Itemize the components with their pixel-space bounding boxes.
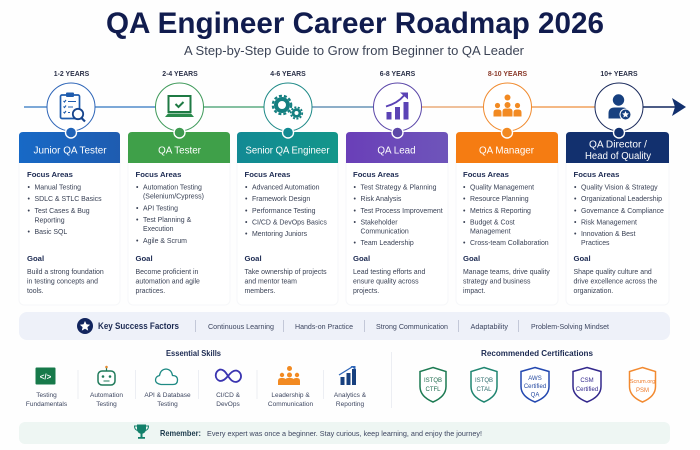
panel: QA manager details: Quality Management bbox=[470, 184, 534, 192]
panel: senior QA engineer details: Performance Testing bbox=[252, 208, 316, 215]
icon: gears stage bbox=[264, 83, 312, 131]
panel: QA manager details: Metrics & Reporting bbox=[470, 208, 531, 215]
skill: analytics and reporting bbox=[334, 366, 367, 408]
panel: QA director details: • bbox=[574, 196, 577, 203]
year labels: 10+ YEARS bbox=[600, 71, 638, 78]
badge: AWS Certified QA bbox=[521, 368, 549, 402]
skill: API and database testing: Testing bbox=[157, 401, 178, 408]
panel: senior QA engineer details: • bbox=[245, 208, 248, 215]
skill: leadership and communication bbox=[268, 366, 313, 408]
panel: QA manager details: Management bbox=[470, 228, 511, 236]
panel: QA tester details: automation and agile bbox=[136, 278, 200, 286]
badge: Scrum PSM bbox=[630, 368, 656, 402]
panel: key success factors: Hands-on Practice bbox=[295, 322, 353, 331]
panel: QA manager details: • bbox=[463, 240, 466, 247]
panel: stage headers: QA Lead bbox=[377, 146, 416, 156]
panel: QA director details bbox=[574, 170, 664, 295]
panel: senior QA engineer details: Focus Areas bbox=[244, 170, 290, 179]
skill: automation testing bbox=[90, 366, 123, 408]
skill: leadership and communication: Leadership & bbox=[271, 392, 310, 399]
skill: leadership and communication: Communication bbox=[268, 401, 313, 408]
badge: Scrum PSM: Scrum.org bbox=[630, 379, 655, 385]
skill: API and database testing bbox=[144, 369, 191, 408]
panel: junior QA tester details: in testing concepts and bbox=[27, 278, 98, 286]
panel: QA manager details: • bbox=[463, 184, 466, 192]
panel: QA manager details: Budget & Cost bbox=[470, 220, 515, 226]
skill: automation testing: Automation bbox=[90, 392, 123, 399]
year labels: 1-2 YEARS bbox=[54, 71, 90, 78]
skill: CI/CD and DevOps: CI/CD & bbox=[216, 392, 241, 399]
panel: junior QA tester details: Manual Testing bbox=[34, 184, 81, 192]
panel: QA director details: Risk Management bbox=[581, 220, 637, 226]
heading: essential skills: Essential Skills bbox=[166, 348, 221, 358]
panel: junior QA tester details: Build a strong foundation bbox=[27, 269, 104, 276]
panel: stage headers: QA Director / bbox=[589, 140, 647, 150]
panel: QA director details: • bbox=[574, 184, 577, 192]
panel: QA lead details: • bbox=[354, 220, 356, 226]
panel: junior QA tester details: Basic SQL bbox=[34, 229, 67, 236]
panel: junior QA tester details: • bbox=[28, 196, 30, 203]
panel: QA director details: • bbox=[574, 220, 577, 226]
skill: testing fundamentals: </> bbox=[40, 372, 52, 382]
panel: QA tester details: • bbox=[136, 217, 139, 224]
panel: key success factors: Key Success Factors bbox=[98, 321, 179, 331]
panel: senior QA engineer details: members. bbox=[244, 288, 275, 295]
panel: QA lead details: projects. bbox=[353, 288, 379, 295]
skill: API and database testing: API & Database bbox=[144, 392, 191, 399]
badge: ISTQB CTAL: CTAL bbox=[477, 387, 492, 393]
panel: stage headers: QA Tester bbox=[158, 146, 202, 156]
panel: QA lead details: • bbox=[354, 208, 356, 215]
panel: QA tester details: Become proficient in bbox=[136, 269, 198, 276]
year labels: 2-4 YEARS bbox=[162, 71, 198, 78]
panel: QA director details: • bbox=[574, 231, 577, 238]
badge: Scrum PSM: PSM bbox=[636, 388, 649, 394]
skill: testing fundamentals bbox=[26, 368, 68, 408]
badge: CSM Certified bbox=[573, 368, 601, 402]
panel: QA lead details: Goal bbox=[353, 254, 370, 263]
panel: QA manager details: Resource Planning bbox=[470, 196, 529, 203]
panel: senior QA engineer details bbox=[244, 170, 327, 295]
panel: QA lead details: • bbox=[354, 184, 356, 192]
panel: QA lead details: Stakeholder bbox=[360, 220, 398, 226]
panel: senior QA engineer details: Take ownership of projects bbox=[244, 269, 327, 276]
panel: QA lead details: Focus Areas bbox=[353, 170, 399, 179]
panel: QA director details: Governance & Compliance bbox=[581, 208, 664, 215]
panel: senior QA engineer details: and mentor team bbox=[244, 278, 297, 286]
panel: QA tester details: Focus Areas bbox=[136, 170, 181, 179]
panel: QA director details: Practices bbox=[581, 240, 610, 247]
panel: senior QA engineer details: • bbox=[245, 231, 248, 238]
panel: QA lead details: Team Leadership bbox=[360, 240, 414, 247]
skill: testing fundamentals: Testing bbox=[36, 392, 57, 399]
panel: senior QA engineer details: Framework Design bbox=[252, 196, 310, 203]
panel: QA tester details: • bbox=[136, 184, 139, 192]
panel: senior QA engineer details: • bbox=[245, 184, 248, 192]
panel: senior QA engineer details: Advanced Automation bbox=[252, 184, 320, 192]
icon: growth chart stage bbox=[374, 83, 422, 131]
badge: ISTQB CTFL: CTFL bbox=[426, 387, 441, 393]
panel: QA director details: Goal bbox=[574, 254, 591, 263]
icon: trophy bbox=[134, 424, 148, 439]
panel: QA manager details: impact. bbox=[463, 288, 485, 295]
timeline arrow bbox=[24, 98, 686, 116]
badge: ISTQB CTFL: ISTQB bbox=[424, 378, 442, 384]
panel: key success factors: Strong Communication bbox=[376, 322, 448, 331]
year labels: 6-8 YEARS bbox=[380, 71, 416, 78]
skill: testing fundamentals: Fundamentals bbox=[26, 401, 68, 408]
panel: stage headers bbox=[19, 132, 669, 163]
year labels: 8-10 YEARS bbox=[488, 71, 528, 78]
panel: QA manager details: Goal bbox=[463, 254, 480, 263]
badge: CSM Certified: Certified bbox=[576, 387, 598, 393]
panel: QA director details: Quality Vision & Strategy bbox=[581, 184, 658, 192]
skill: CI/CD and DevOps bbox=[216, 370, 241, 408]
panel: senior QA engineer details: Mentoring Juniors bbox=[252, 231, 308, 238]
panel: QA tester details: practices. bbox=[136, 288, 165, 295]
skill: CI/CD and DevOps: DevOps bbox=[216, 401, 240, 408]
panel: junior QA tester details: Reporting bbox=[34, 218, 65, 224]
badge: AWS Certified QA: QA bbox=[531, 392, 539, 398]
panel: QA manager details: strategy and business bbox=[463, 278, 531, 286]
panel: QA tester details: Goal bbox=[136, 254, 153, 263]
badge: AWS Certified QA: AWS bbox=[528, 376, 542, 382]
badge: CSM Certified: CSM bbox=[580, 378, 594, 384]
panel: QA director details: • bbox=[574, 208, 577, 215]
panel: card bodies bbox=[19, 150, 669, 305]
panel: key success factors: Continuous Learning bbox=[208, 322, 274, 331]
panel: senior QA engineer details: CI/CD & DevOps Basics bbox=[252, 220, 327, 226]
panel: junior QA tester details: SDLC & STLC Basics bbox=[34, 196, 102, 203]
panel: junior QA tester details: • bbox=[28, 208, 30, 215]
panel: QA manager details: Manage teams, drive quality bbox=[463, 269, 550, 276]
panel: remember banner: Every expert was once a beginner. Stay curious, keep learning, and enjoy the journey! bbox=[207, 429, 482, 438]
panel: QA tester details: Test Planning & bbox=[143, 217, 192, 224]
panel: stage headers: Head of Quality bbox=[585, 151, 651, 162]
panel: senior QA engineer details: Goal bbox=[244, 254, 262, 263]
badge: ISTQB CTAL bbox=[471, 368, 497, 402]
panel: QA manager details: • bbox=[463, 208, 466, 215]
subtitle: A Step-by-Step Guide to Grow from Beginner to QA Leader bbox=[184, 43, 525, 58]
skill: analytics and reporting: Analytics & bbox=[334, 392, 367, 399]
panel: junior QA tester details: Test Cases & Bug bbox=[34, 208, 90, 215]
panel: junior QA tester details bbox=[27, 170, 104, 295]
panel: QA director details: Shape quality culture and bbox=[574, 269, 652, 276]
panel: QA director details: drive excellence across the bbox=[574, 278, 657, 286]
panel: stage headers: Junior QA Tester bbox=[34, 146, 107, 156]
panel: remember banner: Remember: bbox=[160, 429, 201, 438]
panel: QA lead details bbox=[353, 170, 443, 295]
panel: QA lead details: Test Strategy & Planning bbox=[360, 184, 437, 192]
skill: analytics and reporting: Reporting bbox=[336, 401, 364, 408]
icon: leader star stage bbox=[595, 83, 643, 131]
panel: QA tester details: • bbox=[136, 206, 139, 212]
panel: QA lead details: Communication bbox=[360, 228, 409, 236]
panel: QA tester details bbox=[136, 170, 204, 295]
panel: QA tester details: (Selenium/Cypress) bbox=[143, 194, 204, 201]
panel: QA manager details: • bbox=[463, 220, 466, 226]
icon: laptop check stage bbox=[156, 83, 204, 131]
panel: QA lead details: Test Process Improvement bbox=[360, 208, 443, 215]
panel: junior QA tester details: Focus Areas bbox=[27, 170, 73, 179]
panel: QA director details: Organizational Leadership bbox=[581, 196, 662, 203]
badge: AWS Certified QA: Certified bbox=[524, 384, 546, 390]
panel: QA director details: Innovation & Best bbox=[581, 231, 635, 238]
panel: stage headers: Senior QA Engineer bbox=[246, 146, 330, 156]
panel: QA lead details: ensure quality across bbox=[353, 278, 419, 286]
panel: senior QA engineer details: • bbox=[245, 220, 248, 226]
panel: senior QA engineer details: • bbox=[245, 196, 248, 203]
year labels: 4-6 YEARS bbox=[270, 71, 306, 78]
panel: key success factors: Adaptability bbox=[470, 322, 508, 331]
panel: junior QA tester details: tools. bbox=[27, 288, 44, 295]
title: QA Engineer Career Roadmap 2026 bbox=[106, 7, 604, 40]
panel: QA manager details: Focus Areas bbox=[463, 170, 509, 179]
panel: QA lead details: • bbox=[354, 196, 356, 203]
panel: QA manager details: • bbox=[463, 196, 466, 203]
panel: junior QA tester details: Goal bbox=[27, 254, 44, 263]
panel: QA director details: organization. bbox=[574, 288, 613, 295]
icon: clipboard magnifier stage bbox=[47, 83, 95, 131]
panel: key success factors bbox=[19, 312, 670, 340]
panel: QA tester details: Automation Testing bbox=[143, 184, 202, 192]
panel: QA director details: Focus Areas bbox=[574, 170, 619, 179]
icon: team stage bbox=[484, 83, 532, 131]
stage dots bbox=[66, 127, 624, 138]
panel: stage headers: QA Manager bbox=[479, 146, 535, 156]
panel: QA tester details: Agile & Scrum bbox=[143, 238, 187, 245]
panel: QA tester details: • bbox=[136, 238, 139, 245]
panel: key success factors: Problem-Solving Mindset bbox=[531, 322, 610, 331]
panel: QA tester details: API Testing bbox=[143, 206, 178, 212]
panel: remember banner bbox=[19, 422, 670, 444]
panel: QA manager details: Cross-team Collaboration bbox=[470, 240, 549, 247]
panel: QA lead details: Risk Analysis bbox=[360, 196, 402, 203]
badge: ISTQB CTFL bbox=[420, 368, 446, 402]
heading: recommended certifications: Recommended Certifications bbox=[481, 348, 593, 358]
skill: automation testing: Testing bbox=[96, 401, 117, 408]
panel: junior QA tester details: • bbox=[28, 229, 30, 236]
year labels bbox=[54, 71, 638, 78]
panel: junior QA tester details: • bbox=[28, 184, 30, 192]
panel: QA tester details: Execution bbox=[143, 226, 174, 233]
panel: QA lead details: • bbox=[354, 240, 356, 247]
badge: ISTQB CTAL: ISTQB bbox=[475, 378, 493, 384]
panel: QA lead details: Lead testing efforts and bbox=[353, 269, 426, 276]
panel: QA manager details bbox=[463, 170, 550, 295]
